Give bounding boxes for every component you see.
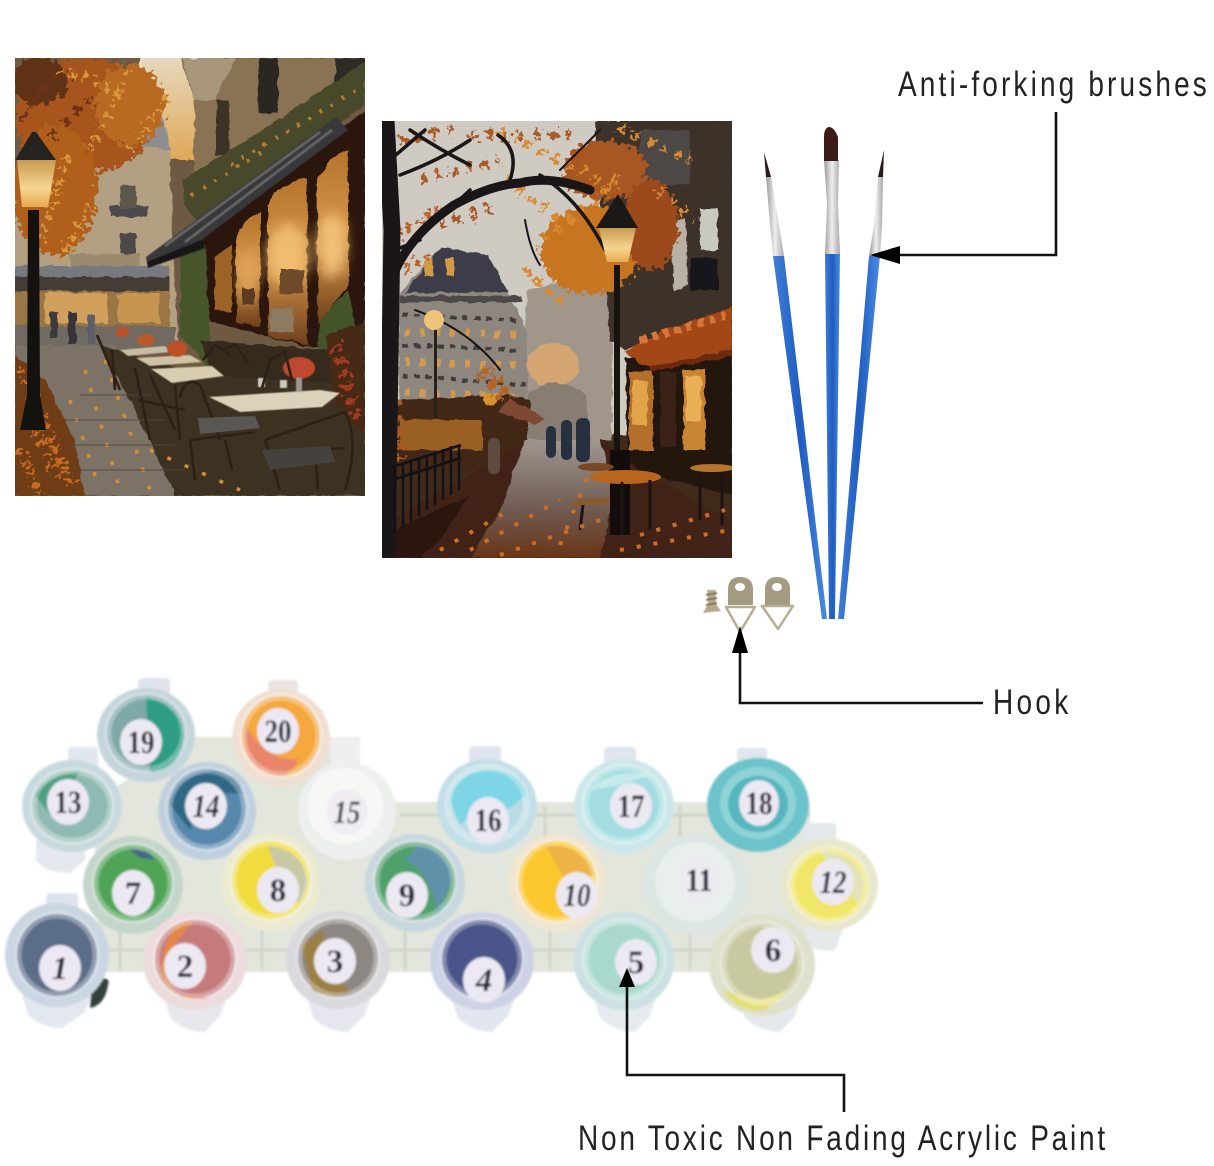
cafe front — [625, 345, 732, 495]
pot 12: 12 — [820, 865, 846, 901]
pot 4 — [430, 912, 534, 1032]
pot 17: 17 — [618, 789, 644, 825]
pot 13: 13 — [54, 785, 82, 821]
pot 14: 14 — [192, 789, 220, 825]
pot 3 — [286, 911, 390, 1032]
panel: painting of rainy autumn Paris street with lamp — [375, 115, 734, 558]
tables and flowers — [115, 327, 340, 412]
pot 8 — [221, 833, 321, 931]
ivy — [183, 62, 365, 225]
pot 19: 19 — [128, 725, 154, 761]
arrow: brushes callout — [870, 112, 1056, 264]
pot 16 — [437, 746, 537, 853]
lamp post with lantern — [614, 265, 620, 455]
tree branches — [386, 121, 605, 550]
pot 17 — [574, 747, 674, 853]
pot 1 — [5, 893, 109, 1028]
arrow: acrylic paint callout — [619, 968, 844, 1112]
pot 1: 1 — [52, 951, 68, 987]
pot 7: 7 — [125, 876, 141, 912]
far building — [15, 105, 178, 340]
pot 5 — [574, 912, 674, 1032]
pot 9: 9 — [399, 878, 415, 914]
pot 18 — [707, 748, 809, 852]
corner building — [398, 248, 528, 400]
cafe tables — [589, 470, 661, 484]
label: hook: Hook — [993, 682, 1068, 722]
awning — [146, 117, 348, 268]
far storefront — [15, 266, 170, 277]
foliage — [12, 56, 360, 495]
brush centre — [824, 127, 840, 619]
pot 20: 20 — [264, 714, 292, 750]
pot 20 — [232, 680, 330, 787]
icon: triangle hook left — [726, 577, 755, 632]
left foliage — [15, 355, 85, 496]
pot 11 — [643, 835, 747, 935]
bush under awning — [180, 245, 212, 370]
pavement and ground — [15, 345, 190, 496]
pot 18: 18 — [746, 786, 772, 822]
arrow: hook callout — [732, 626, 983, 703]
pot 13 — [22, 747, 122, 873]
pot 2: 2 — [177, 949, 193, 985]
street lamp — [20, 210, 46, 430]
tray — [95, 737, 838, 972]
pot 3: 3 — [327, 944, 343, 980]
pot 7 — [83, 836, 183, 934]
pot 9 — [365, 834, 465, 932]
pot 15 — [298, 737, 396, 860]
label: anti-forking brushes: Anti-forking brushes — [898, 64, 1207, 104]
icon: triangle hook right — [762, 577, 793, 629]
pot 4: 4 — [475, 963, 492, 999]
icon: screw — [703, 590, 721, 613]
pot 14 — [158, 762, 256, 860]
iron fence — [392, 445, 461, 533]
brush right — [838, 150, 884, 619]
panel: painting of autumn street cafe terrace — [12, 50, 365, 496]
pot 10: 10 — [564, 878, 590, 914]
pot 19 — [97, 678, 195, 782]
icon: three paint brushes — [764, 127, 884, 619]
brush left — [764, 152, 827, 619]
pot 10 — [508, 834, 606, 932]
foliage — [395, 130, 695, 460]
pot 6 — [709, 914, 815, 1032]
pot 15: 15 — [334, 795, 360, 831]
upper right building — [181, 58, 336, 173]
pot 6: 6 — [765, 933, 781, 969]
pot 2 — [143, 912, 247, 1032]
people walking — [488, 418, 590, 474]
paint pot set — [5, 678, 878, 1032]
shopfronts down the street — [397, 394, 532, 440]
chairs — [97, 335, 352, 490]
ground — [396, 446, 725, 550]
pot 16: 16 — [474, 803, 502, 839]
pot 11: 11 — [686, 863, 712, 899]
right building — [595, 121, 732, 350]
pot 5: 5 — [628, 945, 644, 981]
label: non toxic paint: Non Toxic Non Fading Acrylic Paint — [578, 1118, 1105, 1158]
pot 8: 8 — [270, 873, 286, 909]
sky — [140, 50, 200, 160]
cafe front — [200, 110, 365, 352]
pot 12 — [780, 823, 878, 950]
